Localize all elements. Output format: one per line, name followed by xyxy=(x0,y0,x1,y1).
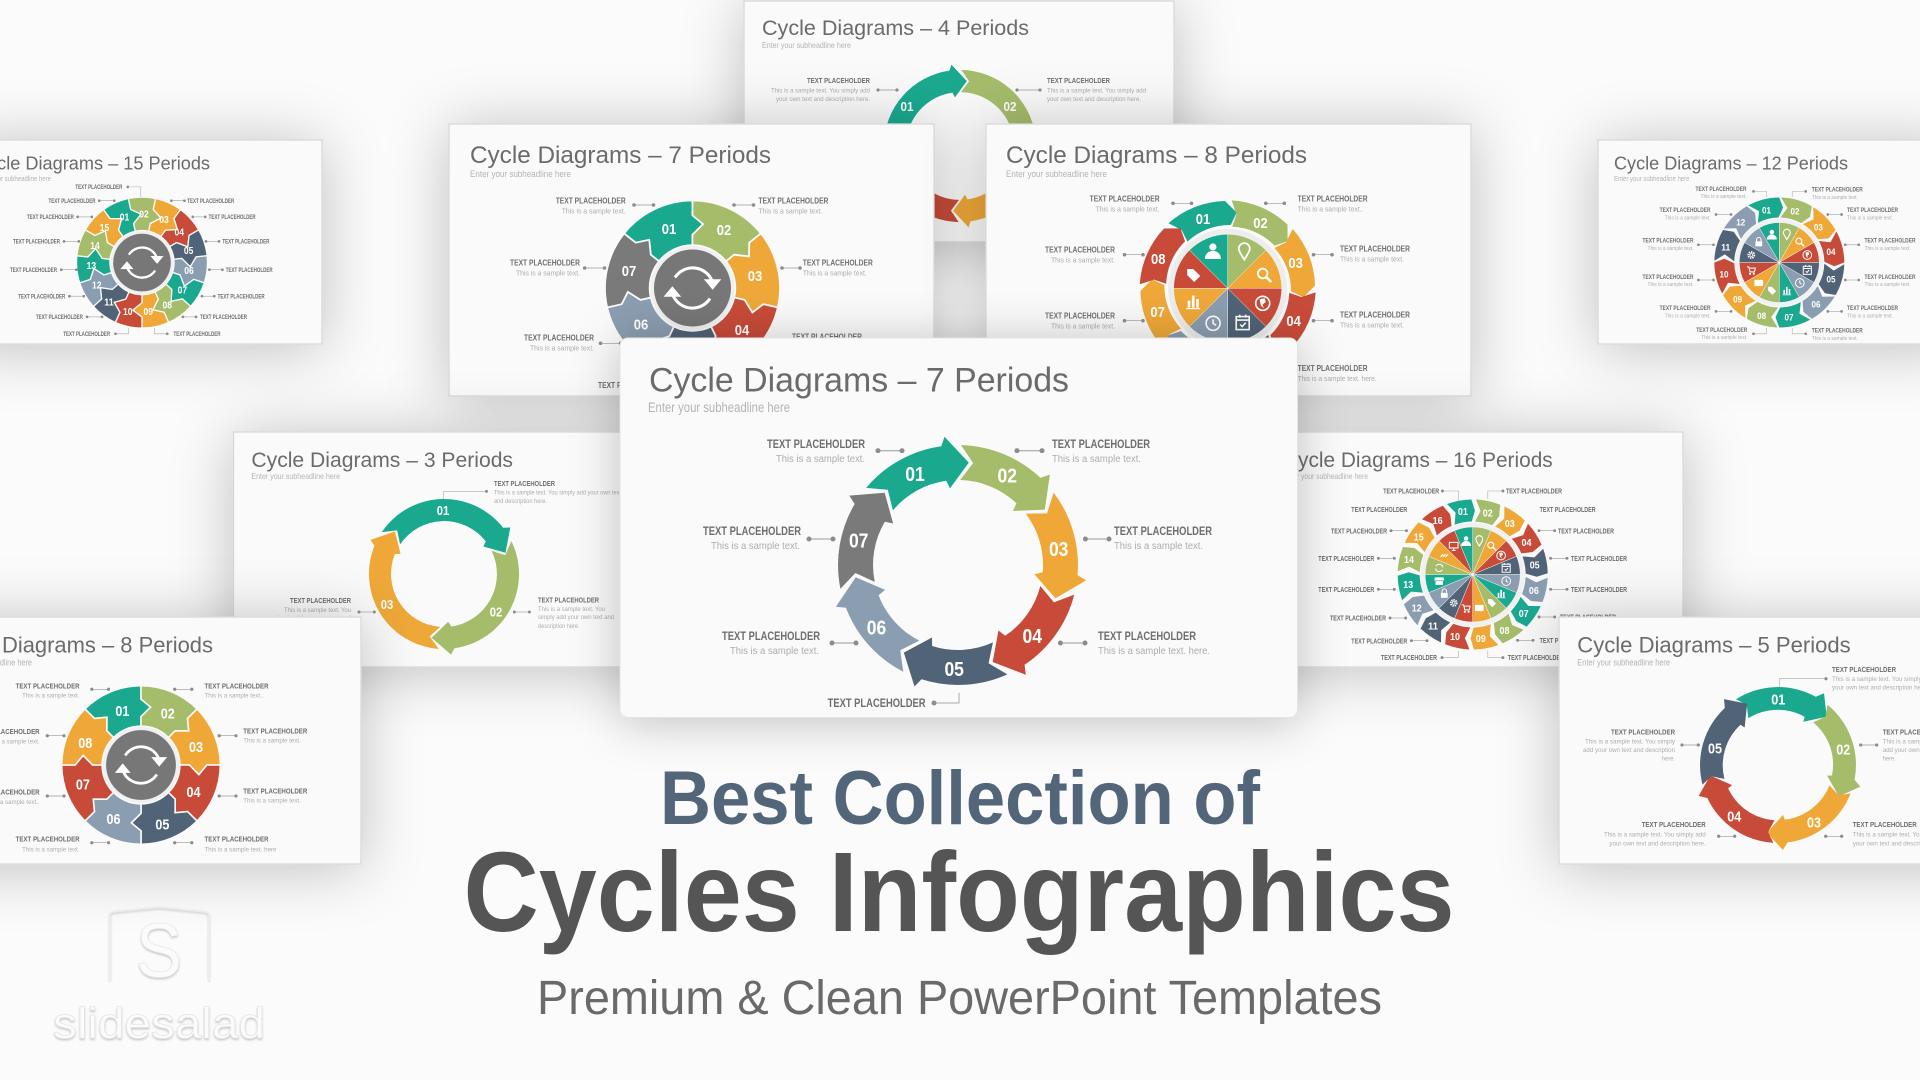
subheading: Enter your subheadline here xyxy=(470,169,571,180)
callout 03: This is a sample text. xyxy=(1114,541,1203,552)
callouts: TEXT PLACEHOLDER xyxy=(200,314,247,321)
callouts: TEXT PLACEHOLDER xyxy=(1340,244,1410,254)
callouts: TEXT PLACEHOLDER xyxy=(36,314,83,321)
callouts xyxy=(10,184,273,338)
callouts: This is a sample text.. xyxy=(1298,205,1364,214)
callouts: TEXT PLACEHOLDER xyxy=(290,596,352,605)
callouts: TEXT PLACEHOLDER xyxy=(1571,556,1627,563)
arrow numbers: 03 xyxy=(1807,815,1821,832)
arrow numbers: 07 xyxy=(1519,608,1529,620)
arrow numbers: 16 xyxy=(1433,515,1443,527)
callouts xyxy=(0,681,308,854)
arrow numbers xyxy=(849,464,1068,681)
panel: cycle diagrams 16 periods xyxy=(1265,432,1683,667)
callouts: add your own text and description xyxy=(1583,747,1675,754)
callout 02: TEXT PLACEHOLDER xyxy=(1052,438,1150,451)
arrow numbers: 03 xyxy=(381,597,393,612)
subheading: Enter your subheadline here xyxy=(1283,471,1368,481)
segment numbers xyxy=(76,703,203,833)
callouts: here. xyxy=(1883,756,1896,763)
callouts: TEXT PLACEHOLDER xyxy=(538,595,600,604)
arrow numbers: 04 xyxy=(1023,626,1043,648)
callout 06: This is a sample text. xyxy=(730,646,819,657)
segment numbers: 07 xyxy=(178,286,188,297)
arrow numbers: 02 xyxy=(490,604,502,619)
arrow numbers: 11 xyxy=(1428,621,1438,633)
heading: 12 periods: Cycle Diagrams – 12 Periods xyxy=(1614,154,1848,174)
callouts: your own text and description here. xyxy=(1609,840,1706,847)
segment numbers: 02 xyxy=(717,223,731,239)
callout 01: TEXT PLACEHOLDER xyxy=(767,438,865,451)
segment numbers: 09 xyxy=(143,307,153,318)
segment numbers: 06 xyxy=(184,266,194,277)
callout right: TEXT PLACEHOLDER xyxy=(1047,76,1111,85)
segment numbers: 04 xyxy=(735,323,749,339)
tagline: Premium & Clean PowerPoint Templates xyxy=(537,972,1382,1025)
callouts: TEXT PLACEHOLDER xyxy=(1090,194,1160,204)
segment numbers: 04 xyxy=(186,784,201,801)
callouts: TEXT PLACEHOLDER xyxy=(1642,238,1694,244)
callouts: This is a sample text. xyxy=(803,269,867,278)
arrow numbers: 01 xyxy=(900,99,914,114)
segment numbers: 06 xyxy=(106,811,120,828)
callouts: This is a sample text. here. xyxy=(1298,374,1377,383)
heading: 8 periods: Cycle Diagrams – 8 Periods xyxy=(1006,142,1307,169)
logo: slidesalad embossed: S xyxy=(136,908,182,994)
arrow numbers: 09 xyxy=(1733,295,1742,306)
panel: cycle diagrams 7 periods with hub xyxy=(449,124,934,397)
cycle diagram: 3 arrows xyxy=(346,499,540,669)
arrow numbers: 01 xyxy=(905,464,925,486)
arrow numbers: 02 xyxy=(998,465,1017,487)
callouts: This is a sample text. xyxy=(1096,205,1160,214)
arrow numbers xyxy=(900,99,1016,114)
segment numbers: 05 xyxy=(184,246,194,257)
callouts: This is a sample text. xyxy=(1812,195,1858,201)
arrow numbers: 13 xyxy=(1403,579,1413,591)
callouts: TEXT PLACEHOLDER xyxy=(1045,310,1115,320)
callouts: TEXT PLACEHOLDER xyxy=(1660,207,1711,214)
callouts: TEXT PLACEHOLDER xyxy=(204,681,269,690)
callouts: TEXT PLACEHOLDER xyxy=(75,184,123,191)
subheading: Enter your subheadline here xyxy=(1006,169,1107,180)
callout left: your own text and description here. xyxy=(776,96,870,103)
callouts: TEXT PLACEHOLDER xyxy=(1318,556,1374,563)
arrow numbers: 02 xyxy=(1483,508,1493,520)
arrow numbers: 06 xyxy=(1812,299,1820,310)
segment numbers: 03 xyxy=(748,269,762,285)
callouts xyxy=(1642,186,1916,342)
arrow numbers xyxy=(1403,506,1540,645)
segment numbers: 03 xyxy=(159,215,169,226)
arrow numbers: 05 xyxy=(1530,560,1540,572)
callout 07: This is a sample text. xyxy=(711,541,800,552)
callouts: TEXT PLACEHOLDER xyxy=(524,333,594,343)
subheading: Enter your subheadline here xyxy=(1614,174,1690,183)
callouts: TEXT PLACEHOLDER xyxy=(204,835,269,844)
callouts: TEXT PLACEHOLDER xyxy=(1847,207,1898,214)
arrow numbers: 08 xyxy=(1757,311,1766,322)
callouts: simply add your own text and xyxy=(538,614,614,621)
arrow 02 xyxy=(943,413,1065,539)
callout 07 xyxy=(703,525,833,552)
callout left: This is a sample text. You simply add xyxy=(771,87,870,94)
callout right: your own text and description here. xyxy=(1047,96,1141,103)
callout 01: This is a sample text. xyxy=(776,454,865,465)
callouts xyxy=(510,195,873,390)
callout 02 xyxy=(1017,438,1150,465)
callout 01 xyxy=(767,438,902,465)
callouts: This is a sample text. You xyxy=(538,606,605,613)
logo: slidesalad embossed xyxy=(53,907,265,1048)
callouts: TEXT PLACEHOLDER xyxy=(1045,244,1115,254)
heading: 5 periods: Cycle Diagrams – 5 Periods xyxy=(1577,633,1851,658)
arrow numbers: 04 xyxy=(1522,537,1532,549)
callouts: TEXT PLACEHOLDER xyxy=(209,214,256,221)
callout 02: This is a sample text. xyxy=(1052,454,1141,465)
callouts: TEXT PLACEHOLDER xyxy=(1351,638,1407,645)
callouts: TEXT PLACEHOLDER xyxy=(16,835,80,844)
callout 03: TEXT PLACEHOLDER xyxy=(1114,525,1212,538)
heading: 7 periods: Cycle Diagrams – 7 Periods xyxy=(470,142,771,169)
callout 05 xyxy=(828,693,959,710)
subheading: 4 periods: Enter your subheadline here xyxy=(762,40,851,50)
segment numbers: 15 xyxy=(100,223,110,234)
callouts: This is a sample text. xyxy=(1051,255,1115,264)
callouts xyxy=(1045,194,1410,383)
segment numbers: 04 xyxy=(174,227,184,238)
callouts: This is a sample text.. xyxy=(204,693,264,700)
callouts: TEXT PLACEHOLDER xyxy=(218,293,265,300)
callouts: TEXT PLACEHOLDER xyxy=(243,786,308,795)
callouts: TEXT PLACEHOLDER xyxy=(243,726,308,735)
panel: main cycle diagrams 7 periods xyxy=(620,338,1298,720)
arrow numbers: 12 xyxy=(1736,217,1745,228)
callouts xyxy=(1318,489,1627,662)
segment numbers: 06 xyxy=(634,318,648,334)
callouts: TEXT PLACEHOLDER xyxy=(792,332,862,342)
callouts: TEXT PLACEHOLDER xyxy=(1318,587,1374,594)
panel: cycle diagrams 4 periods xyxy=(744,1,1174,242)
callouts: This is a sample text. xyxy=(562,206,626,215)
callouts: TEXT PLACEHOLDER xyxy=(1340,309,1410,319)
segment numbers: 08 xyxy=(163,300,172,311)
callout right: This is a sample text. You simply add xyxy=(1047,87,1146,94)
callouts: TEXT PLACEHOLDER xyxy=(1558,528,1614,535)
panel: cycle diagrams 8 periods with hub xyxy=(0,617,361,864)
segment numbers: 01 xyxy=(120,212,130,224)
arrow numbers: 06 xyxy=(1529,585,1539,597)
callouts: TEXT PLACEHOLDER xyxy=(1383,489,1439,496)
cycle diagram: 7 arrows xyxy=(800,413,1104,720)
callouts: This is a sample text. xyxy=(243,798,301,805)
segment numbers: 08 xyxy=(78,735,92,752)
cycle diagram: 7 puzzle segments with hub xyxy=(581,180,793,397)
heading: main 7 periods: Cycle Diagrams – 7 Periods xyxy=(649,362,1069,400)
cycle diagram: 5 arrows xyxy=(1691,687,1867,857)
callouts: This is a sample text. You simply add xyxy=(1604,832,1706,839)
arrow numbers: 05 xyxy=(944,659,964,681)
subheading: Enter your subheadline here xyxy=(251,471,340,481)
callouts: TEXT PLACEHOLDER xyxy=(48,198,96,205)
callouts: TEXT PLACEHOLDER xyxy=(1330,616,1386,623)
segment numbers: 10 xyxy=(123,307,133,318)
heading: 16 periods: Cycle Diagrams – 16 Periods xyxy=(1283,449,1553,472)
callouts: TEXT PLACEHOLDER xyxy=(1560,614,1616,622)
segment numbers: 07 xyxy=(76,776,90,793)
arrow numbers: 01 xyxy=(1771,692,1785,709)
arrow numbers: 01 xyxy=(1458,506,1468,518)
callouts: This is a sample text. xyxy=(1340,255,1404,264)
callouts: TEXT PLACEHOLDER xyxy=(226,267,273,274)
callouts: This is a sample text. xyxy=(758,206,822,215)
panel: cycle diagrams 15 periods xyxy=(0,140,322,344)
arrow numbers: 08 xyxy=(1151,252,1166,268)
arrow numbers: 15 xyxy=(1414,531,1424,543)
callouts xyxy=(275,479,621,630)
segment numbers: 07 xyxy=(622,264,636,280)
callouts: This is a sample text. xyxy=(1665,216,1711,222)
arrow numbers: 02 xyxy=(1790,206,1800,217)
segment numbers xyxy=(87,209,194,318)
arrow 06 xyxy=(831,567,925,683)
callouts: TEXT PLACEHOLDER xyxy=(1847,305,1898,312)
segment numbers: 05 xyxy=(155,816,169,833)
arrow numbers: 01 xyxy=(1762,205,1772,216)
callout 04: This is a sample text. here. xyxy=(1098,646,1210,657)
arrow numbers: 08 xyxy=(1500,625,1510,637)
arrow numbers: 10 xyxy=(1720,269,1728,280)
callout 07: TEXT PLACEHOLDER xyxy=(703,525,801,538)
callouts: TEXT PLACEHOLDER xyxy=(1660,305,1711,312)
heading: 3 periods: Cycle Diagrams – 3 Periods xyxy=(251,449,513,472)
arrow numbers: 03 xyxy=(1288,256,1303,272)
callouts: simply add your own text and xyxy=(275,615,351,622)
callouts: TEXT PLACEHOLDER xyxy=(222,239,270,246)
callouts: TEXT PLACEHOLDER xyxy=(803,258,873,268)
segment numbers: 03 xyxy=(189,739,203,756)
callouts: description here. xyxy=(538,623,580,630)
callouts: This is a sample text. xyxy=(22,693,80,700)
callouts: TEXT PLACEHOLDER xyxy=(16,681,80,690)
arrow numbers: 04 xyxy=(1727,808,1742,825)
segment numbers: 13 xyxy=(87,261,97,272)
cycle diagram: 8 arrows around pie xyxy=(1124,185,1331,392)
callouts: TEXT PLACEHOLDER xyxy=(63,331,111,338)
callouts: TEXT PLACEHOLDER xyxy=(1381,655,1437,662)
callouts: TEXT PLACEHOLDER xyxy=(758,195,828,205)
arrow numbers xyxy=(1150,212,1303,330)
callouts: This is a sample text. xyxy=(1700,194,1747,200)
callouts: TEXT PLACEHOLDER xyxy=(494,479,556,488)
panel: cycle diagrams 5 periods xyxy=(1559,617,1920,864)
callouts: TEXT PLACEHOLDER xyxy=(598,380,668,390)
title line 2: Cycles Infographics xyxy=(464,829,1454,955)
arrow numbers: 05 xyxy=(1826,275,1836,286)
callouts: TEXT PLACEHOLDER xyxy=(1351,507,1407,514)
arrow numbers: 03 xyxy=(1049,539,1068,561)
arrow numbers xyxy=(1708,692,1850,832)
cycle diagram: 4 arrows xyxy=(879,65,1041,227)
callouts: TEXT PLACEHOLDER xyxy=(13,239,60,246)
callouts: This is a sample text. xyxy=(530,344,594,353)
callouts: This is a sample text. xyxy=(1701,335,1748,341)
callouts: This is a sample text. xyxy=(1847,216,1893,222)
callouts: This is a sample text. xyxy=(1648,246,1694,252)
callouts: TEXT PLACEHOLDER xyxy=(1571,587,1627,594)
callouts: This is a sample text. xyxy=(243,738,301,745)
callouts: TEXT PLACEHOLDER xyxy=(18,293,66,300)
callouts: This is a sample text. xyxy=(1864,282,1911,288)
cycle diagram: 12 arrows around pie xyxy=(1708,191,1851,334)
panel: cycle diagrams 8 periods with icon pie xyxy=(986,124,1471,396)
arrow 03 xyxy=(1009,488,1104,604)
arrow numbers: 04 xyxy=(1286,314,1301,330)
callouts: TEXT PLACEHOLDER xyxy=(1832,665,1896,674)
segment numbers xyxy=(622,222,762,339)
callouts: TEXT PLACEHOLDER xyxy=(1611,727,1675,736)
arrow 07 xyxy=(800,477,922,603)
callouts: TEXT PLACEHOLDER xyxy=(1696,327,1748,334)
arrow numbers: 02 xyxy=(1004,99,1016,114)
callouts: This is a sample text. xyxy=(1340,320,1404,329)
cycle diagram: 15 puzzle segments with hub xyxy=(75,195,210,331)
callouts: description here. xyxy=(309,624,351,630)
segment numbers: 01 xyxy=(662,222,676,238)
callouts: This is a sample text. You simply add your own text xyxy=(494,490,621,496)
arrow numbers: 02 xyxy=(1253,216,1268,232)
callouts: This is a sample text. You xyxy=(284,607,351,614)
arrow numbers: 03 xyxy=(1814,222,1823,233)
callouts: here. xyxy=(1662,756,1675,763)
arrow numbers: 07 xyxy=(849,530,868,552)
segment numbers: 02 xyxy=(139,209,149,220)
callouts: This is a sample text. xyxy=(516,269,580,278)
heading: 4 periods: Cycle Diagrams – 4 Periods xyxy=(762,16,1029,40)
arrow numbers: 11 xyxy=(1721,243,1731,254)
callout left: TEXT PLACEHOLDER xyxy=(807,76,871,85)
arrow numbers: 02 xyxy=(1836,742,1850,759)
arrow numbers: 14 xyxy=(1404,554,1414,566)
panel: cycle diagrams 3 periods xyxy=(234,432,652,669)
callouts: This is a sample text. You simply xyxy=(1585,738,1676,745)
callout 04 xyxy=(1060,630,1210,657)
arrow numbers xyxy=(381,503,502,619)
segment numbers: 11 xyxy=(104,297,114,308)
callout left xyxy=(771,76,897,103)
subheading: Enter your subheadline here xyxy=(1577,658,1670,668)
callouts: TEXT PLACEHOLDER xyxy=(1812,328,1863,334)
callouts: This is a sample text. here xyxy=(204,847,277,854)
callouts: TEXT PLACEHOLDER xyxy=(1642,820,1706,829)
callouts: TEXT PLACEHOLDER xyxy=(1642,274,1694,281)
arrow 04 xyxy=(972,574,1096,685)
callout 05: TEXT PLACEHOLDER xyxy=(828,697,926,710)
arrow numbers: 03 xyxy=(1505,518,1515,530)
callouts: and description here. xyxy=(494,498,547,505)
cycle diagram: 8 puzzle segments with hub xyxy=(45,669,237,861)
segment numbers: 01 xyxy=(115,703,129,720)
callouts: TEXT PLACEHOLDER xyxy=(1298,194,1368,204)
arrow numbers: 07 xyxy=(1150,305,1165,321)
callouts: TEXT PLACEHOLDER xyxy=(556,195,626,205)
callouts: TEXT PLACEHOLDER xyxy=(1540,507,1596,514)
callouts: This is a sample text. xyxy=(22,847,80,854)
callouts: TEXT PLACEHOLDER xyxy=(510,258,580,268)
callouts: TEXT PLACEHOLDER xyxy=(1508,655,1564,662)
callouts: This is a sample text. xyxy=(1812,336,1858,342)
arrow numbers: 05 xyxy=(1708,741,1722,758)
segment numbers: 12 xyxy=(92,280,102,291)
arrow numbers: 12 xyxy=(1412,602,1422,614)
callouts: TEXT PLACEHOLDER xyxy=(10,267,57,274)
callout 06 xyxy=(722,630,856,657)
callouts: This is a sample text. xyxy=(1864,246,1911,252)
arrow numbers: 01 xyxy=(1196,212,1210,228)
callouts: TEXT PLACEHOLDER xyxy=(27,214,74,221)
segment numbers: 02 xyxy=(161,705,175,722)
callouts: TEXT PLACEHOLDER xyxy=(1812,186,1863,194)
arrow numbers xyxy=(1720,205,1836,323)
arrow numbers: 04 xyxy=(1826,247,1836,258)
arrow numbers: 06 xyxy=(867,618,886,640)
callouts: TEXT PLACEHOLDER xyxy=(187,198,235,205)
arrow numbers: 01 xyxy=(437,503,449,518)
callouts: TEXT PLACEHOLDER xyxy=(174,331,221,338)
callouts: TEXT PLACEHOLDER xyxy=(1331,528,1387,535)
callouts: TEXT PLACEHOLDER xyxy=(1298,363,1368,373)
callouts: TEXT PLACEHOLDER xyxy=(1696,186,1747,193)
arrow numbers: 07 xyxy=(1784,312,1794,323)
arrow 05 xyxy=(893,610,1017,720)
callouts: This is a sample text. xyxy=(1051,321,1115,330)
callouts: This is a sample text. xyxy=(1847,314,1893,320)
arrow numbers: 09 xyxy=(1476,633,1486,645)
callout 06: TEXT PLACEHOLDER xyxy=(722,630,820,643)
callout 04: TEXT PLACEHOLDER xyxy=(1098,630,1196,643)
subheading: main: Enter your subheadline here xyxy=(648,400,790,415)
logo: slidesalad embossed: slidesalad xyxy=(53,999,265,1048)
callouts: This is a sample text. xyxy=(1648,282,1694,288)
arrow 01 xyxy=(866,437,969,510)
title line 1: Best Collection of xyxy=(660,756,1261,841)
panel: cycle diagrams 12 periods xyxy=(1598,140,1920,344)
cycle diagram: 16 arrows around pie xyxy=(1394,495,1552,654)
segment numbers: 14 xyxy=(90,241,100,252)
callouts: TEXT PLACEHOLDER xyxy=(1540,638,1596,645)
arrow numbers: 10 xyxy=(1450,631,1460,643)
callouts: This is a sample text. xyxy=(1665,314,1711,320)
callouts xyxy=(1583,665,1920,847)
callout 03 xyxy=(1085,525,1212,552)
callouts: TEXT PLACEHOLDER xyxy=(1506,489,1562,496)
callout right xyxy=(1017,76,1146,103)
